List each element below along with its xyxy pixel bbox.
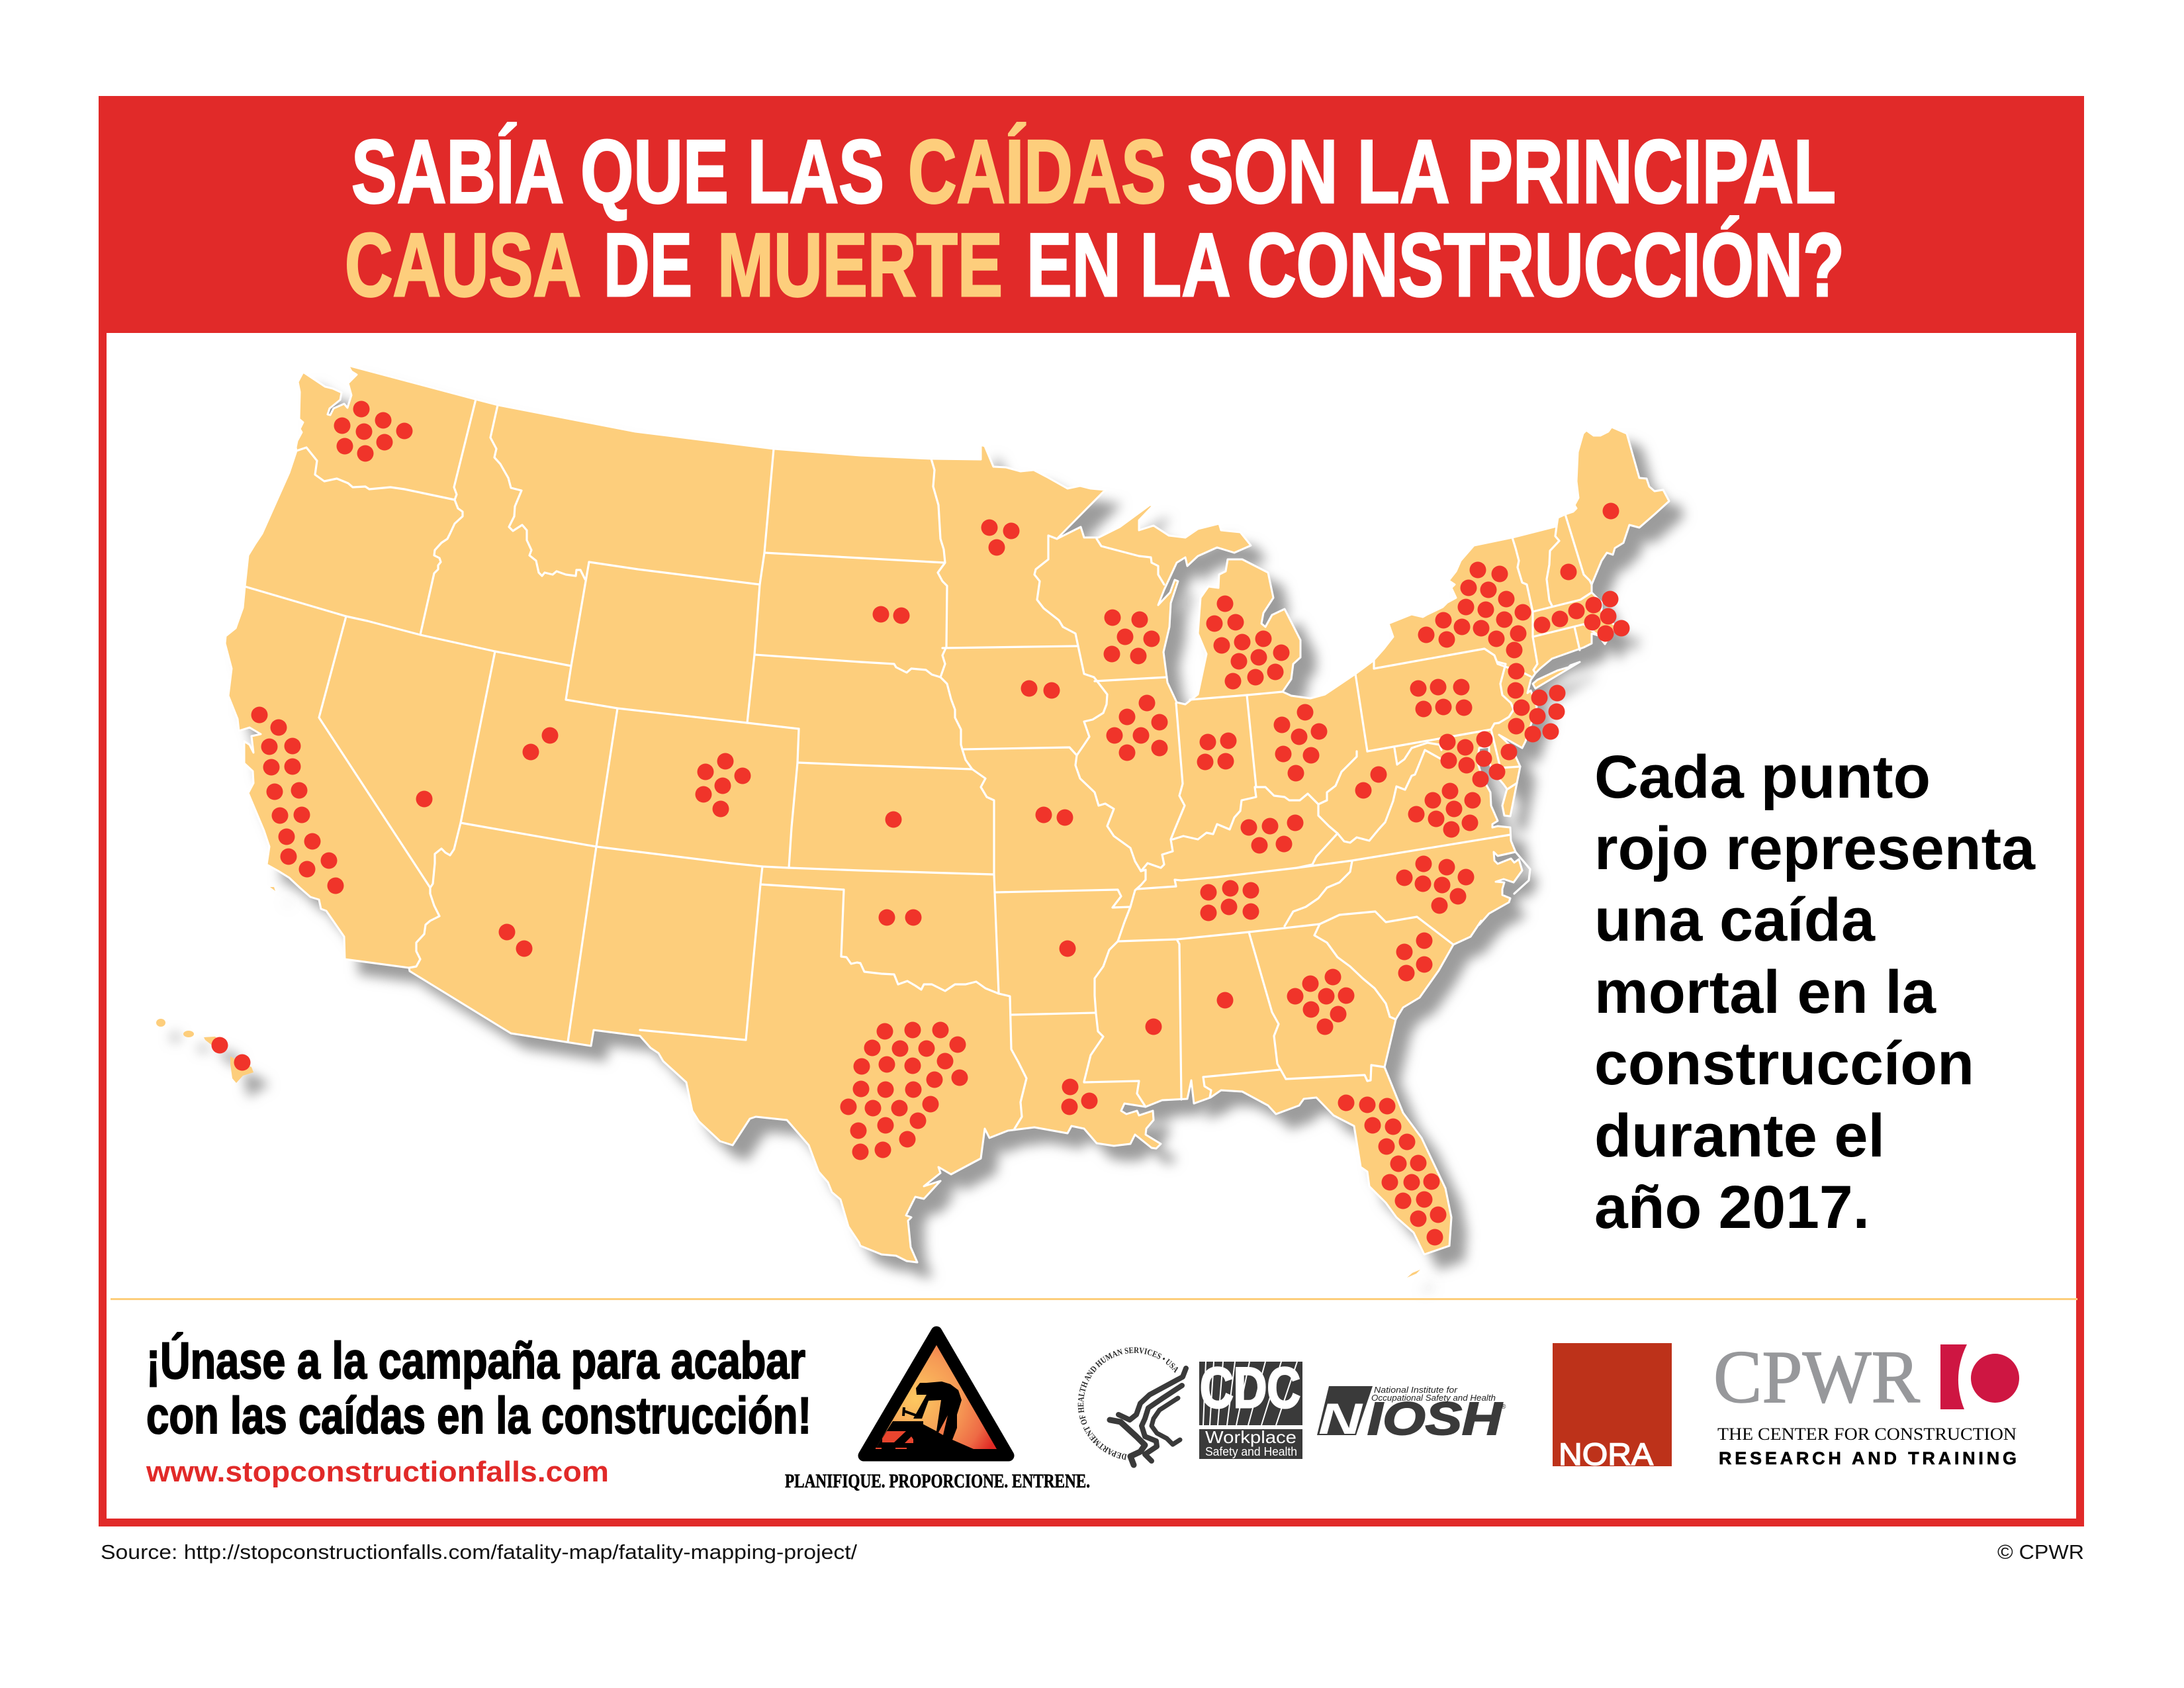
dots: Maryland and Delaware [1439, 731, 1517, 788]
panel: red frame [103, 100, 2080, 1523]
dots: New England [1534, 503, 1629, 642]
dots: Alabama [1216, 992, 1234, 1009]
dots: Ohio [1273, 704, 1328, 781]
side statement text: Cada punto [1594, 743, 1931, 811]
dots: New Jersey [1508, 663, 1566, 743]
dots: South Carolina [1396, 932, 1432, 981]
campaign call to action: con las caídas en la construcción! [146, 1386, 811, 1444]
Hawaii and small islands [156, 887, 1420, 1278]
dots: West Virginia [1355, 767, 1387, 798]
dots: Washington [334, 401, 413, 462]
logo: NIOSH: National Institute for [1374, 1385, 1458, 1395]
dots: Mississippi [1145, 1018, 1162, 1035]
dots: North Carolina [1396, 855, 1475, 914]
dots: Missouri [1035, 806, 1073, 826]
logo: NIOSH [1317, 1385, 1506, 1444]
header band with title: DE [604, 214, 692, 315]
dots: Texas [841, 1022, 968, 1160]
dots: Hawaii [212, 1037, 250, 1071]
side statement text: año 2017. [1594, 1174, 1870, 1241]
header band with title: CAÍDAS [908, 121, 1166, 222]
dots: Florida [1338, 1095, 1447, 1246]
dots: Nevada [416, 790, 433, 808]
side statement text: construccíon [1594, 1030, 1974, 1098]
dots: Iowa [1021, 680, 1060, 699]
logo: stop construction falls triangle [785, 1332, 1090, 1492]
header band with title: CAUSA [345, 214, 581, 315]
header band with title: SABÍA QUE LAS [351, 121, 884, 222]
dots: Illinois [1107, 695, 1167, 761]
header band with title: SON LA PRINCIPAL [1187, 121, 1836, 222]
dots: Wisconsin [1104, 609, 1160, 665]
logo: NIOSH: Occupational Safety and Health [1371, 1393, 1496, 1403]
logo: CDC workplace safety and health: Workplace [1205, 1427, 1297, 1447]
map of the United States [156, 365, 1669, 1278]
dots: South Dakota [872, 606, 909, 624]
dots: California [251, 707, 344, 894]
fatal fall dots by state [212, 401, 1629, 1246]
side statement text [1594, 743, 2036, 1241]
dots: Minnesota [981, 519, 1019, 556]
dots: Indiana [1197, 732, 1236, 771]
dots: Utah [523, 727, 559, 760]
Long Island [1533, 662, 1580, 688]
logo: CDC workplace safety and health: Safety and Health [1205, 1445, 1297, 1458]
logo: NIOSH: ® [1501, 1403, 1506, 1411]
dots: Colorado [695, 753, 751, 817]
logo: CDC workplace safety and health: CDC [1200, 1356, 1300, 1420]
campaign call to action: www.stopconstructionfalls.com [146, 1456, 609, 1488]
logo: NIOSH: IOSH [1367, 1393, 1503, 1444]
dots: Louisiana [1062, 1079, 1097, 1115]
dots: Kansas [886, 812, 901, 827]
logo: CDC workplace safety and health [1199, 1356, 1302, 1459]
side statement text: rojo representa [1594, 815, 2036, 882]
logo: CPWR: RESEARCH AND TRAINING [1719, 1448, 2017, 1468]
logo: NIOSH: N [1318, 1394, 1363, 1443]
dots: Kentucky [1240, 814, 1304, 854]
state borders [245, 399, 1598, 1129]
dots: New York [1418, 561, 1531, 658]
dots: Arizona [499, 924, 532, 957]
dots: Virginia [1408, 782, 1481, 838]
campaign call to action: ¡Únase a la campaña para acabar [146, 1331, 805, 1389]
logo: CPWR: CPWR [1713, 1336, 1921, 1419]
dots: Michigan [1206, 596, 1289, 690]
header band with title: MUERTE [717, 214, 1003, 315]
land shapes with shadow [225, 365, 1669, 1262]
dots: Arkansas [1059, 940, 1076, 957]
campaign call to action [146, 1331, 811, 1488]
dots: Pennsylvania [1410, 679, 1472, 718]
logo: NORA [1553, 1343, 1672, 1472]
logo: CPWR: THE CENTER FOR CONSTRUCTION [1717, 1425, 2017, 1444]
copyright: © CPWR [1997, 1540, 2084, 1564]
dots: Georgia [1287, 969, 1354, 1035]
logo: CPWR [1713, 1336, 2019, 1468]
side statement text: durante el [1594, 1102, 1885, 1170]
side statement text: mortal en la [1594, 959, 1936, 1026]
logo: stop construction falls triangle: PLANIFIQUE. PROPORCIONE. ENTRENE. [785, 1470, 1090, 1492]
header band with title: EN LA CONSTRUCCIÓN? [1026, 214, 1844, 315]
side statement text: una caída [1594, 886, 1876, 954]
logo: NORA: NORA [1559, 1436, 1654, 1472]
source line: Source: http://stopconstructionfalls.com/fatality-map/fatality-mapping-project/ [101, 1540, 857, 1564]
logo: HHS seal: DEPARTMENT OF HEALTH AND HUMAN SERVICES • USA [1077, 1347, 1178, 1460]
dots: Tennessee [1201, 880, 1259, 921]
header band with title [99, 96, 2084, 333]
dots: Oklahoma [879, 910, 921, 925]
